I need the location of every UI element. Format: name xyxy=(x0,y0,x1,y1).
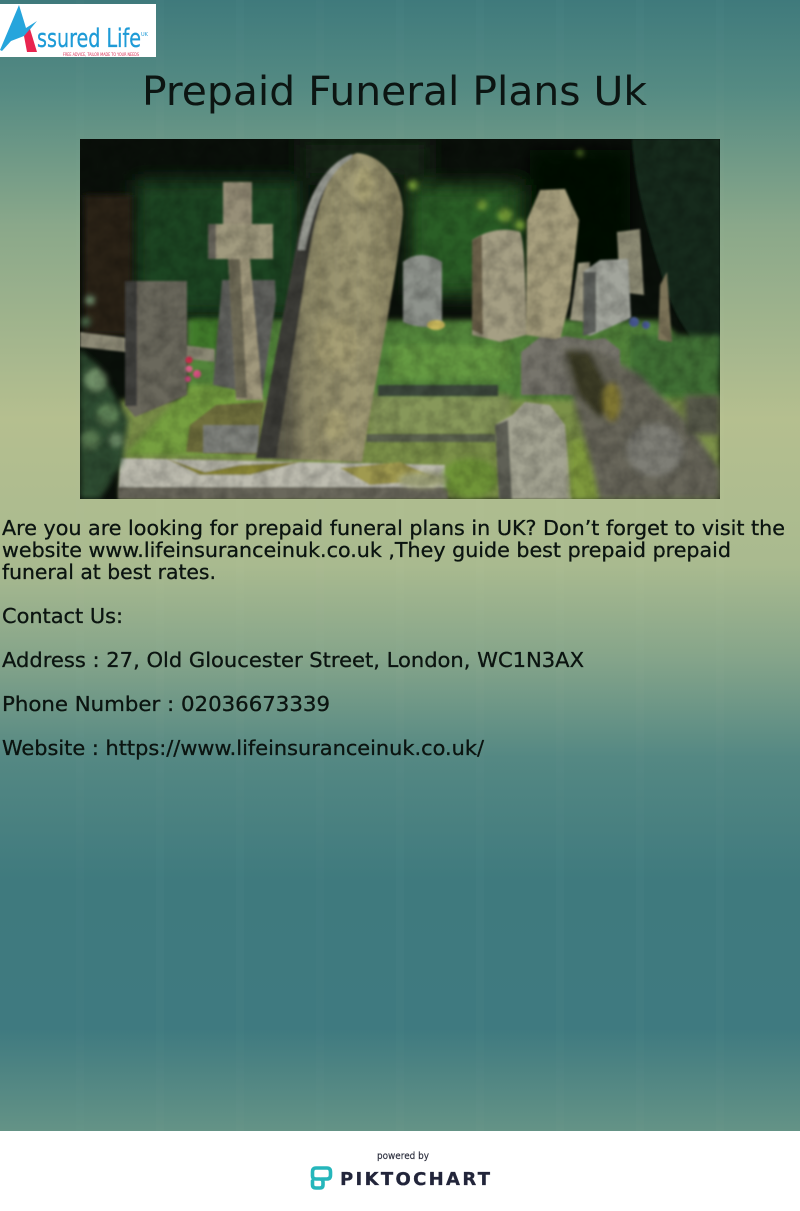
large leaning headstone xyxy=(256,153,403,462)
left tall stone xyxy=(125,281,187,417)
intro paragraph xyxy=(2,516,785,584)
pink flowers xyxy=(185,356,201,382)
intro paragraph: Are you are looking for prepaid funeral plans in UK? Don’t forget to visit the xyxy=(2,516,785,540)
foreground flowers xyxy=(398,458,498,498)
website: Website : https://www.lifeinsuranceinuk.co.uk/ xyxy=(2,736,484,760)
footer: powered by Piktochart: powered by xyxy=(377,1151,429,1162)
address: Address : 27, Old Gloucester Street, London, WC1N3AX xyxy=(2,648,584,672)
path strip and low curb xyxy=(80,332,215,362)
wooden cross xyxy=(208,182,273,400)
foreground slab xyxy=(118,458,448,499)
back stone behind cross xyxy=(213,280,276,395)
phone number: Phone Number : 02036673339 xyxy=(2,692,330,716)
contact heading: Contact Us: xyxy=(2,604,123,628)
logo: Assured Life: ssured Life xyxy=(37,24,141,54)
logo: Assured Life: UK xyxy=(141,32,149,38)
tree trunk xyxy=(84,195,132,335)
logo: Assured Life xyxy=(0,4,156,58)
small front headstone xyxy=(495,402,572,499)
footer: powered by Piktochart: PIKTOCHART xyxy=(340,1169,491,1190)
trees and hedge background xyxy=(135,139,630,315)
title: Prepaid Funeral Plans Uk xyxy=(142,69,648,115)
left foreground shrub xyxy=(80,295,128,499)
intro paragraph: funeral at best rates. xyxy=(2,560,216,584)
footer: powered by Piktochart xyxy=(0,1131,800,1211)
blurred foreground stone xyxy=(562,345,720,499)
mossy plinth xyxy=(186,402,264,455)
grass xyxy=(120,318,720,499)
logo: Assured Life: FREE ADVICE, TAILOR MADE TO YOUR NEEDS xyxy=(63,52,139,58)
right dark yew xyxy=(632,139,720,340)
distant gravestones xyxy=(403,189,672,395)
photo: cemetery with gravestones xyxy=(80,139,720,499)
intro paragraph: website www.lifeinsuranceinuk.co.uk ,They guide best prepaid prepaid xyxy=(2,538,731,562)
blue and yellow flowers xyxy=(427,317,650,330)
bright leaves xyxy=(408,150,583,230)
